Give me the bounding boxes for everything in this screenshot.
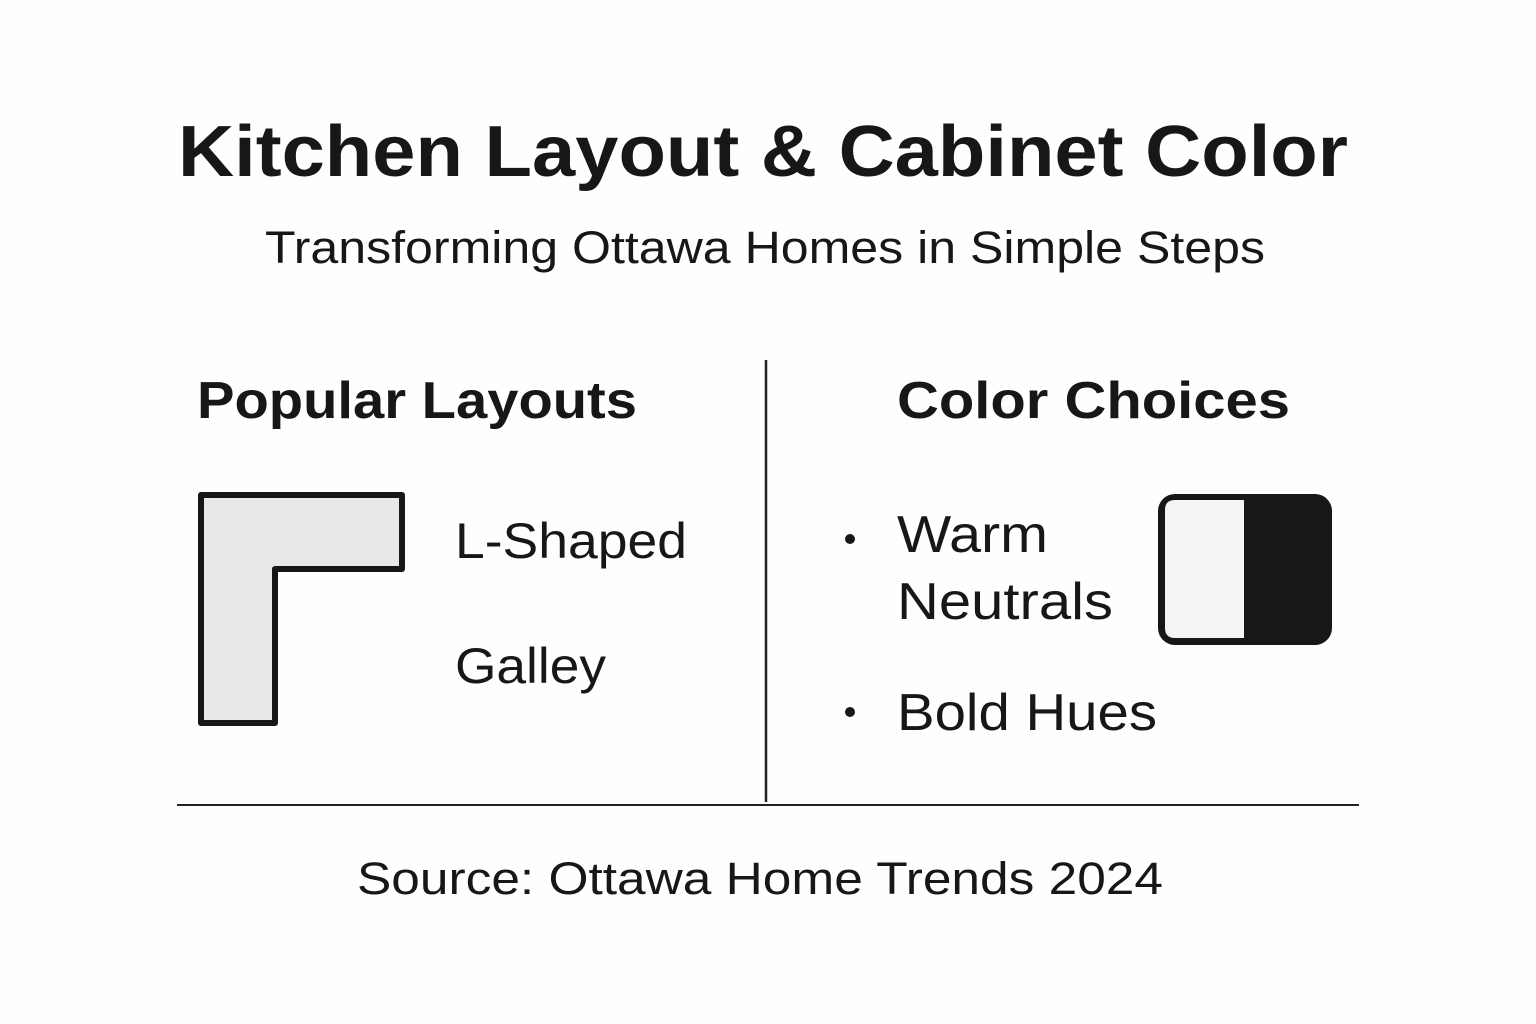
- bullet: bold hues: Bold Hues: [897, 684, 1157, 742]
- label: Galley: Galley: [455, 638, 606, 694]
- panel: popular layouts: [197, 372, 687, 723]
- heading: color choices: Color Choices: [897, 372, 1290, 430]
- source: Source: Ottawa Home Trends 2024: [357, 853, 1163, 904]
- subtitle: Transforming Ottawa Homes in Simple Steps: [265, 222, 1265, 273]
- label: L-Shaped: L-Shaped: [455, 513, 687, 569]
- bullet: warm neutrals: Warm: [897, 506, 1048, 564]
- panel: color choices: [845, 372, 1332, 742]
- bullet: warm neutrals: [845, 506, 1113, 631]
- title: Kitchen Layout & Cabinet Color: [178, 112, 1348, 192]
- heading: popular layouts: Popular Layouts: [197, 372, 637, 430]
- bullet: warm neutrals: Neutrals: [897, 573, 1113, 631]
- icon: L-shaped layout: [201, 495, 402, 723]
- icon: color swatch: [1158, 494, 1332, 645]
